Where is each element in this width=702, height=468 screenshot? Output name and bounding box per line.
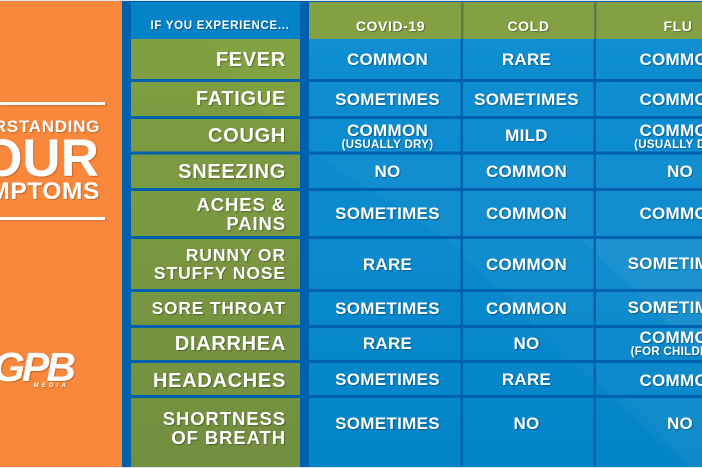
cell: headaches covid: SOMETIMES: [335, 370, 440, 389]
cell: sneezing cold: COMMON: [486, 162, 567, 181]
cell: cough covid: (USUALLY DRY): [342, 139, 433, 151]
cell: sneezing flu: NO: [667, 162, 693, 181]
cell: diarrhea flu: [631, 328, 702, 359]
cell: headaches cold: RARE: [502, 370, 551, 389]
header: flu: FLU: [663, 18, 692, 34]
cell: fever cold: RARE: [502, 50, 551, 69]
row label: shortness of breath: [163, 408, 286, 448]
row label: runny or stuffy nose: RUNNY OR: [186, 245, 286, 265]
cell: sneezing covid: NO: [374, 162, 401, 181]
cell: aches covid: SOMETIMES: [335, 204, 440, 223]
row label: shortness of breath: SHORTNESS: [163, 408, 286, 429]
cell: runny nose covid: RARE: [363, 255, 412, 274]
cell: shortness of breath cold: NO: [513, 414, 540, 433]
cell: sore throat cold: COMMON: [486, 299, 567, 318]
row label: aches and pains: PAINS: [226, 213, 286, 234]
row label: runny or stuffy nose: STUFFY NOSE: [154, 263, 286, 283]
cell: fatigue cold: SOMETIMES: [474, 90, 579, 109]
row label: sneezing: SNEEZING: [178, 161, 286, 183]
title: understanding your symptoms: [0, 102, 106, 222]
cell: shortness of breath flu: NO: [667, 414, 693, 433]
header: COVID-19: COVID-19: [356, 18, 425, 34]
cell: cough covid: [342, 121, 434, 152]
header: cold: COLD: [507, 18, 550, 34]
cell: diarrhea cold: NO: [513, 334, 540, 353]
cell: diarrhea covid: RARE: [363, 334, 412, 353]
panel: orange title sidebar: [0, 102, 106, 390]
cell: shortness of breath covid: SOMETIMES: [335, 414, 440, 433]
row label: aches and pains: [196, 194, 286, 234]
cell: cough cold: MILD: [505, 126, 548, 145]
cell: fever covid: COMMON: [347, 50, 428, 69]
cell: sore throat covid: SOMETIMES: [335, 299, 440, 318]
cell: cough covid: COMMON: [347, 121, 428, 140]
row label: fatigue: FATIGUE: [196, 88, 286, 110]
row label: runny or stuffy nose: [154, 245, 286, 283]
row label: sore throat: SORE THROAT: [152, 298, 286, 318]
logo: GPB Media: MEDIA: [34, 383, 69, 389]
cell: runny nose cold: COMMON: [486, 255, 567, 274]
row label: shortness of breath: OF BREATH: [171, 427, 286, 448]
row label: cough: COUGH: [208, 125, 286, 147]
row label: fever: FEVER: [216, 49, 286, 71]
cell: aches cold: COMMON: [486, 204, 567, 223]
row label: diarrhea: DIARRHEA: [175, 333, 286, 355]
cell: cough flu: [634, 121, 702, 152]
cell: fatigue covid: SOMETIMES: [335, 90, 440, 109]
row label: headaches: HEADACHES: [153, 370, 286, 392]
row label: aches and pains: ACHES &: [196, 194, 286, 215]
header: if you experience: IF YOU EXPERIENCE...: [150, 20, 290, 32]
